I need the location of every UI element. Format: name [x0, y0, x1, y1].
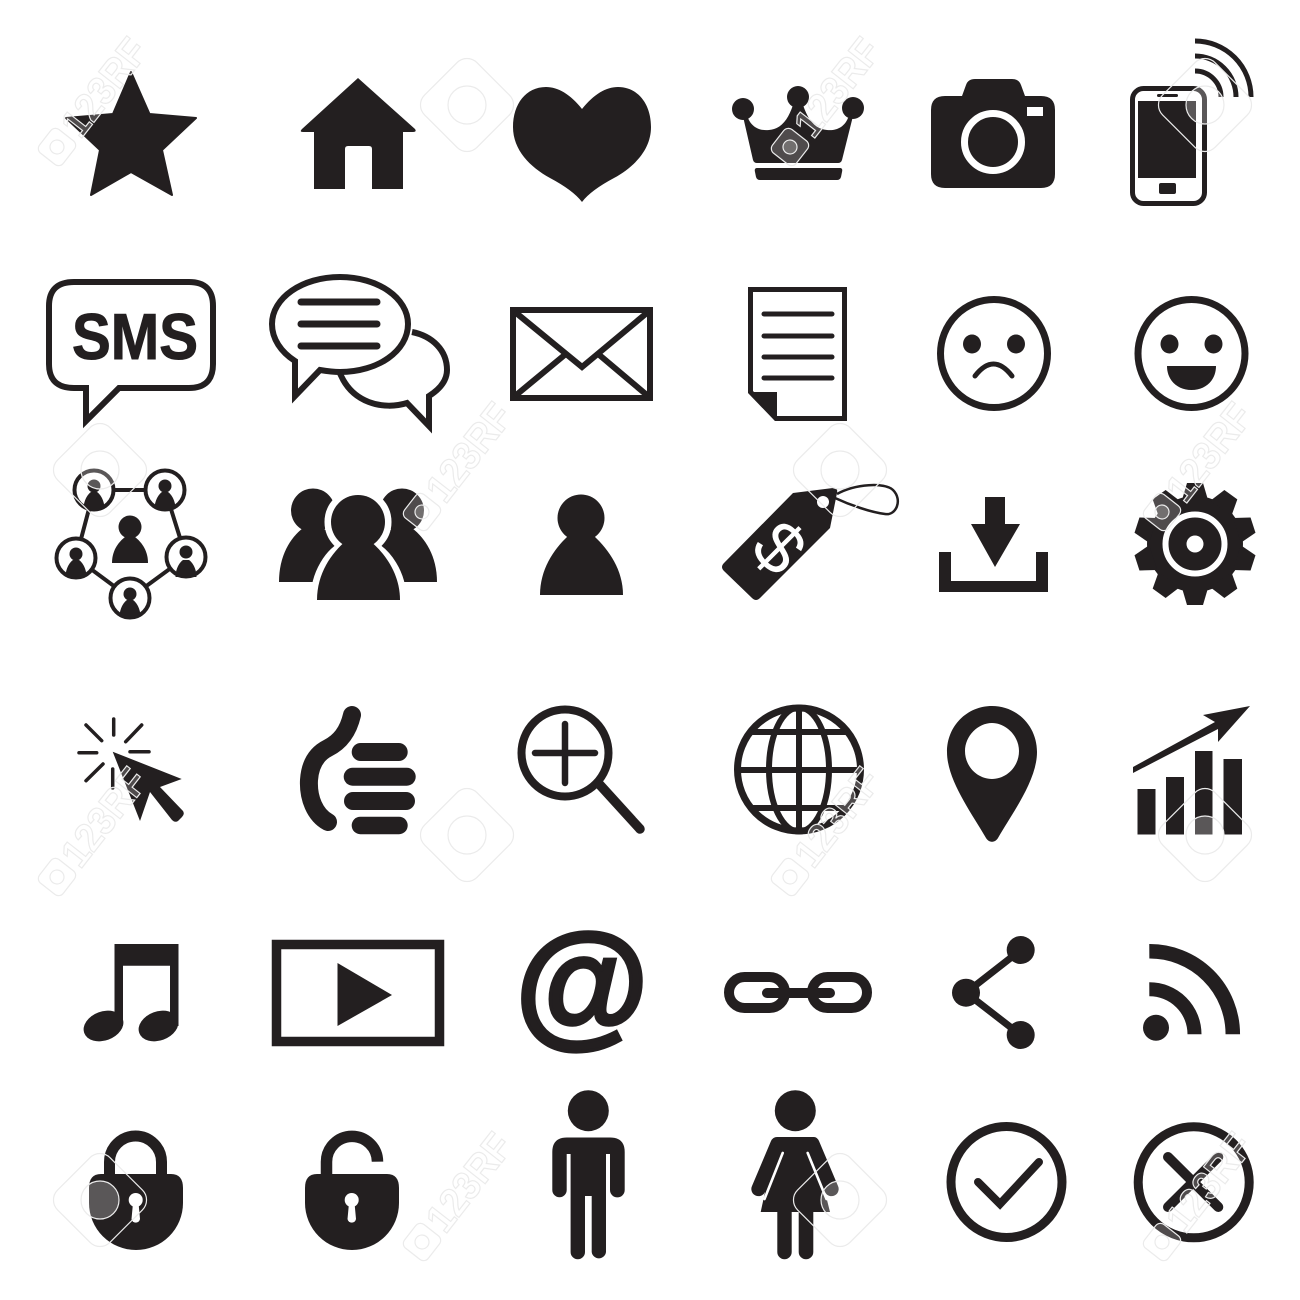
icon: star [66, 72, 196, 195]
icon: growth chart [1133, 706, 1250, 834]
icon: smartphone with signal [1132, 41, 1251, 204]
icon: man [552, 1090, 625, 1259]
watermark stamps: 123RF [786, 30, 889, 145]
SMS label: SMS [72, 300, 198, 373]
icon: price tag [722, 485, 898, 600]
icon: settings gear [1133, 483, 1257, 605]
icon: download [939, 497, 1048, 592]
icon: chat bubbles [272, 277, 447, 426]
icon: check mark circle [951, 1126, 1062, 1238]
icon: thumbs up [309, 715, 416, 834]
icon: sad face [940, 300, 1048, 408]
watermark stamps: 123RF [418, 395, 521, 510]
icon: happy face [1138, 300, 1245, 408]
watermark stamps: 123RF [53, 30, 156, 145]
dollar sign: $ [737, 506, 821, 590]
icon: closed padlock [89, 1136, 183, 1250]
icon: envelope [513, 310, 650, 398]
icon: RSS feed [1143, 951, 1233, 1041]
icon: globe [737, 707, 861, 832]
icon: cross circle [1138, 1127, 1249, 1238]
icon: user network [56, 470, 206, 618]
icon: SMS bubble [49, 282, 213, 421]
watermark stamps: 123RF [418, 1125, 521, 1240]
icon: map pin [947, 706, 1037, 842]
watermark stamps: 123RF [786, 760, 889, 875]
icon: group of people [279, 488, 437, 600]
icon: camera [931, 79, 1055, 188]
watermark stamps: 123RF [1158, 395, 1261, 510]
icon: open padlock [305, 1136, 399, 1250]
icon: woman [751, 1090, 839, 1259]
icon: share [952, 936, 1035, 1049]
icon: zoom magnifier [522, 710, 640, 829]
icon: music notes [79, 944, 183, 1047]
icon: at sign: @ [515, 906, 649, 1060]
icon: document [750, 290, 844, 420]
icon: single person [540, 494, 623, 595]
watermark stamps: 123RF [1158, 1125, 1261, 1240]
watermark stamps: 123RF [53, 760, 156, 875]
icon: mouse click cursor [79, 719, 184, 822]
icon: house [301, 78, 416, 189]
icon: chain link [729, 977, 867, 1008]
icon: crown [732, 86, 864, 180]
icon: heart [513, 87, 651, 202]
icon: video player [276, 944, 440, 1042]
